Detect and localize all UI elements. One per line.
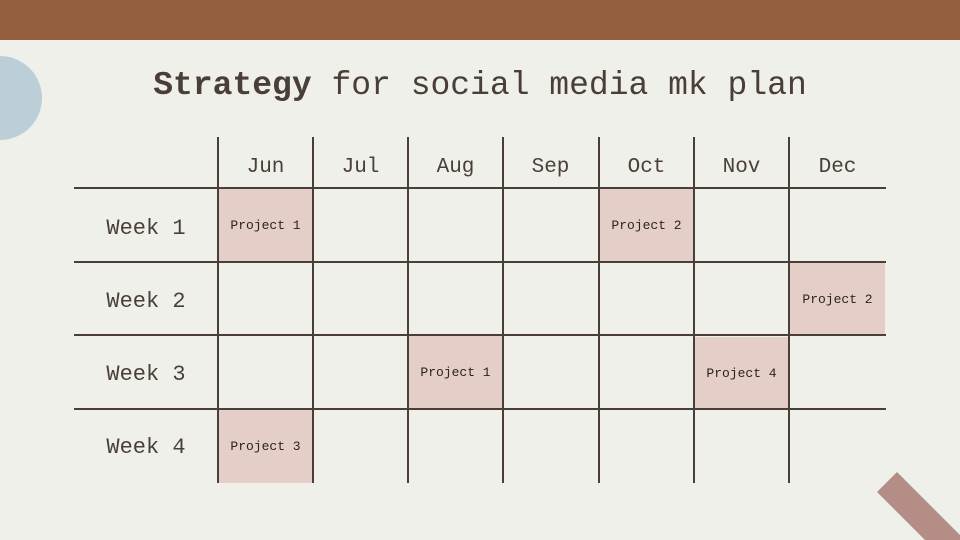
schedule table: Week 3 xyxy=(106,362,186,387)
project cells xyxy=(219,189,885,483)
schedule table: Project 4 xyxy=(706,366,777,381)
schedule table: Jun xyxy=(247,156,284,179)
schedule table: Week 4 xyxy=(106,435,186,460)
schedule table: Week 2 xyxy=(106,289,186,314)
month headers xyxy=(247,156,856,179)
title: Strategy for social media mk plan xyxy=(153,67,807,104)
decorative circle xyxy=(0,56,42,140)
schedule table: Project 3 xyxy=(230,439,301,454)
schedule table: Jul xyxy=(342,156,379,179)
schedule table: Week 1 xyxy=(106,216,186,241)
schedule table: Nov xyxy=(723,156,760,179)
schedule table: Aug xyxy=(437,156,474,179)
schedule table: Oct xyxy=(628,156,665,179)
schedule table: Project 2 xyxy=(802,292,873,307)
schedule table: Project 2 xyxy=(611,218,682,233)
schedule table: Project 1 xyxy=(420,365,491,380)
schedule table: Dec xyxy=(819,156,856,179)
top bar xyxy=(0,0,960,40)
week labels xyxy=(106,216,186,460)
schedule table: Sep xyxy=(532,156,569,179)
schedule table: Project 1 xyxy=(230,218,301,233)
